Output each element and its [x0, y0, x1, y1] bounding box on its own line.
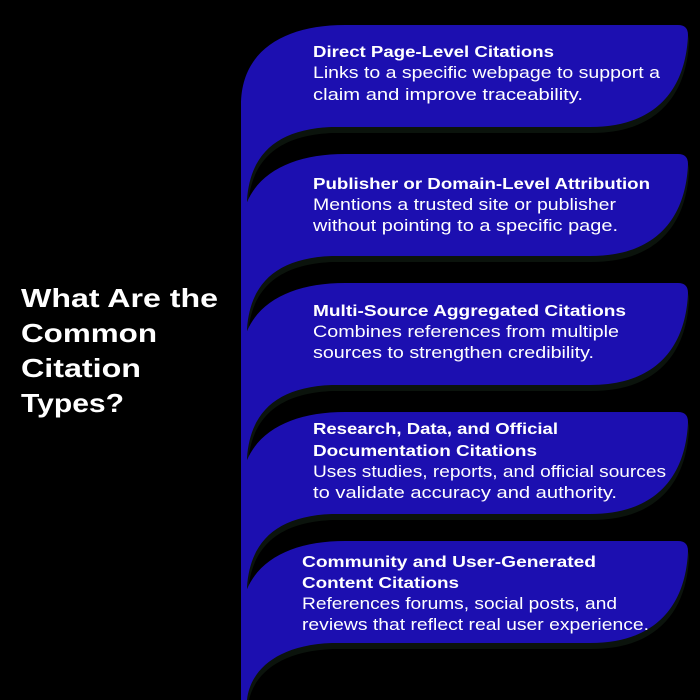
title: Citation: [21, 353, 141, 383]
text block: card 4: [313, 421, 666, 502]
text block: card 5: Content Citations: [302, 575, 459, 592]
text block: card 3: sources to strengthen credibility.: [313, 344, 594, 362]
text block: card 4: Research, Data, and Official: [313, 421, 558, 438]
title: Common: [21, 318, 157, 348]
text block: card 5: reviews that reflect real user experience.: [302, 616, 649, 634]
panel: card 3: [241, 283, 689, 519]
text block: card 3: Combines references from multiple: [313, 323, 619, 341]
text block: card 4: to validate accuracy and authority.: [313, 484, 617, 502]
text block: card 5: References forums, social posts, and: [302, 595, 617, 613]
text block: card 5: Community and User-Generated: [302, 554, 596, 571]
panel: card 5: [241, 541, 689, 700]
panel: card 4: [241, 412, 689, 648]
title: What Are the: [21, 283, 218, 313]
text block: card 1: [313, 44, 661, 104]
text block: card 2: [312, 176, 650, 235]
text block: card 2: Publisher or Domain-Level Attribution: [313, 176, 650, 193]
panel: card 1: [241, 25, 689, 261]
text block: card 1: Links to a specific webpage to support a: [313, 64, 661, 82]
text block: card 2: without pointing to a specific page.: [312, 217, 618, 235]
text block: card 3: [313, 303, 626, 362]
text block: card 5: [302, 554, 649, 634]
title: Types?: [21, 388, 124, 418]
panel: card 2: [241, 154, 689, 390]
text block: card 1: claim and improve traceability.: [313, 86, 583, 104]
text block: card 4: Documentation Citations: [313, 443, 537, 460]
title: [21, 283, 218, 418]
text block: card 4: Uses studies, reports, and official sources: [313, 463, 666, 481]
text block: card 2: Mentions a trusted site or publisher: [313, 196, 617, 214]
text block: card 3: Multi-Source Aggregated Citations: [313, 303, 626, 320]
text block: card 1: Direct Page-Level Citations: [313, 44, 554, 61]
